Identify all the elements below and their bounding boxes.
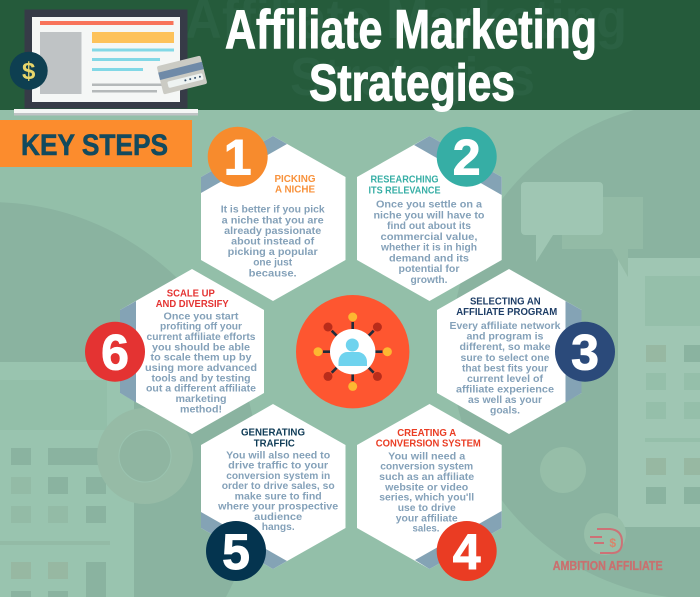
step 4 text bbox=[379, 450, 474, 535]
step 4 text: such as an affiliate bbox=[379, 471, 474, 483]
step 4 text: website or video bbox=[384, 481, 468, 493]
step 6 text: using more advanced bbox=[145, 362, 257, 374]
step 4 heading: CREATING A bbox=[397, 427, 457, 439]
step 3 text: goals. bbox=[490, 404, 520, 416]
step 4 text: your affiliate bbox=[396, 512, 458, 524]
step 4: creating a conversion system: 4 bbox=[453, 524, 481, 580]
step 2: researching its relevance bbox=[357, 127, 502, 301]
step 5 text: You will also need to bbox=[226, 449, 330, 461]
step 3 text: that best fits your bbox=[462, 362, 548, 374]
step 3 heading: SELECTING AN bbox=[470, 295, 541, 307]
step 3 text bbox=[450, 320, 561, 416]
step 3 text: current level of bbox=[467, 373, 544, 385]
step 2 text: demand and its bbox=[389, 252, 469, 264]
step 6 text: you should be able bbox=[152, 341, 250, 353]
icon: credit card bbox=[157, 55, 207, 95]
step 6 text bbox=[145, 310, 257, 415]
step 2 text: whether it is in high bbox=[380, 242, 477, 254]
step 4 text: sales. bbox=[412, 523, 440, 535]
step 2: researching its relevance: 2 bbox=[453, 130, 481, 186]
step 3 heading: AFFILIATE PROGRAM bbox=[456, 306, 557, 318]
icon: dollar coin bbox=[10, 52, 48, 90]
step 6 text: method! bbox=[180, 403, 222, 415]
step 5 text: make sure to find bbox=[235, 490, 322, 502]
step 1 text: already passionate bbox=[224, 225, 321, 237]
step 1 text: one just bbox=[253, 257, 293, 269]
step 2 text bbox=[374, 198, 484, 286]
step 2 text: commercial value, bbox=[380, 231, 478, 243]
step 2 text: growth. bbox=[410, 274, 448, 286]
header band bbox=[0, 0, 700, 112]
step 3: selecting an affiliate program bbox=[437, 269, 615, 434]
title bbox=[225, 0, 597, 112]
background: right window panel bbox=[612, 249, 700, 527]
step 1: picking a niche bbox=[201, 127, 346, 301]
logo: ambition affiliate bbox=[553, 513, 663, 573]
step 5 text: where your prospective bbox=[217, 500, 338, 512]
logo: ambition affiliate: AMBITION AFFILIATE bbox=[553, 558, 663, 573]
step 5 text bbox=[217, 449, 338, 533]
step 1 heading: A NICHE bbox=[275, 184, 315, 196]
step 6 text: profiting off your bbox=[160, 321, 242, 333]
ghost title behind heading: Strategies bbox=[290, 47, 535, 107]
step 1 text: It is better if you pick bbox=[221, 204, 325, 216]
logo: ambition affiliate: $ bbox=[609, 536, 616, 550]
step 5 heading: GENERATING bbox=[241, 427, 305, 439]
step 2 text: Once you settle on a bbox=[376, 198, 482, 210]
step 5 text: audience bbox=[254, 511, 302, 523]
step 2 heading bbox=[368, 173, 440, 196]
step 6 text: to scale them up by bbox=[150, 352, 252, 364]
step 3 text: as well as your bbox=[468, 394, 542, 406]
step 3 text: and program is bbox=[466, 331, 544, 343]
step 1 text: because. bbox=[249, 267, 297, 279]
step 3: selecting an affiliate program: 3 bbox=[571, 324, 599, 380]
step 1 text: about instead of bbox=[231, 236, 315, 248]
step 2 text: niche you will have to bbox=[374, 209, 484, 221]
key steps banner: KEY STEPS bbox=[21, 129, 168, 162]
step 5: generating traffic: 5 bbox=[222, 524, 250, 580]
step 5 heading bbox=[241, 427, 305, 449]
step 2 text: potential for bbox=[398, 263, 460, 275]
step 6 heading bbox=[156, 288, 229, 310]
step 2 text: find out about its bbox=[387, 220, 471, 232]
icon: dollar coin: $ bbox=[22, 58, 36, 85]
ghost title behind heading bbox=[185, 0, 627, 107]
step 6 text: current affiliate efforts bbox=[146, 331, 256, 343]
step 4 text: use to drive bbox=[398, 502, 456, 514]
step 3 text: affiliate experience bbox=[456, 384, 554, 396]
step 1 text: a niche that you are bbox=[222, 214, 324, 226]
step 6 text: marketing bbox=[176, 393, 226, 405]
icon: central network of people bbox=[296, 295, 409, 408]
step 4 text: series, which you'll bbox=[379, 492, 474, 504]
background: gear circle bbox=[97, 408, 193, 504]
step 5: generating traffic bbox=[201, 404, 346, 581]
key steps banner bbox=[0, 120, 192, 167]
step 3 text: different, so make bbox=[460, 341, 551, 353]
step 6 heading: AND DIVERSIFY bbox=[156, 298, 229, 310]
background: speech bubbles bbox=[521, 182, 643, 277]
step 1 heading bbox=[274, 173, 316, 196]
step 2 heading: RESEARCHING bbox=[370, 173, 438, 185]
step 3 heading bbox=[456, 295, 557, 318]
step 6: scale up and diversify bbox=[85, 269, 264, 434]
step 2 heading: ITS RELEVANCE bbox=[368, 184, 440, 196]
step 5 text: conversion system in bbox=[226, 470, 330, 482]
background: faded coin bbox=[540, 447, 586, 493]
step 4 heading bbox=[376, 427, 481, 450]
step 4: creating a conversion system bbox=[357, 404, 502, 581]
icon: laptop with web page bbox=[14, 10, 198, 116]
step 5 heading: TRAFFIC bbox=[254, 437, 295, 449]
step 1 text: picking a popular bbox=[228, 246, 318, 258]
step 1 text bbox=[221, 204, 325, 279]
step 4 heading: CONVERSION SYSTEM bbox=[376, 438, 481, 450]
step 1 heading: PICKING bbox=[274, 173, 316, 185]
step 6 text: tools and by testing bbox=[152, 372, 250, 384]
step 1: picking a niche: 1 bbox=[224, 130, 252, 186]
step 5 text: order to drive sales, so bbox=[222, 480, 335, 492]
step 6 text: out a different affiliate bbox=[146, 383, 256, 395]
step 4 text: conversion system bbox=[380, 461, 473, 473]
step 6 heading: SCALE UP bbox=[167, 288, 215, 300]
step 4 text: You will need a bbox=[388, 450, 465, 462]
step 3 text: sure to select one bbox=[460, 352, 550, 364]
step 6 text: Once you start bbox=[164, 310, 239, 322]
step 6: scale up and diversify: 6 bbox=[101, 324, 129, 380]
title: Strategies bbox=[309, 54, 515, 112]
step 5 text: hangs. bbox=[262, 521, 295, 533]
background: left window panel bbox=[0, 362, 134, 597]
step 3 text: Every affiliate network bbox=[450, 320, 561, 332]
step 5 text: drive traffic to your bbox=[228, 460, 328, 472]
